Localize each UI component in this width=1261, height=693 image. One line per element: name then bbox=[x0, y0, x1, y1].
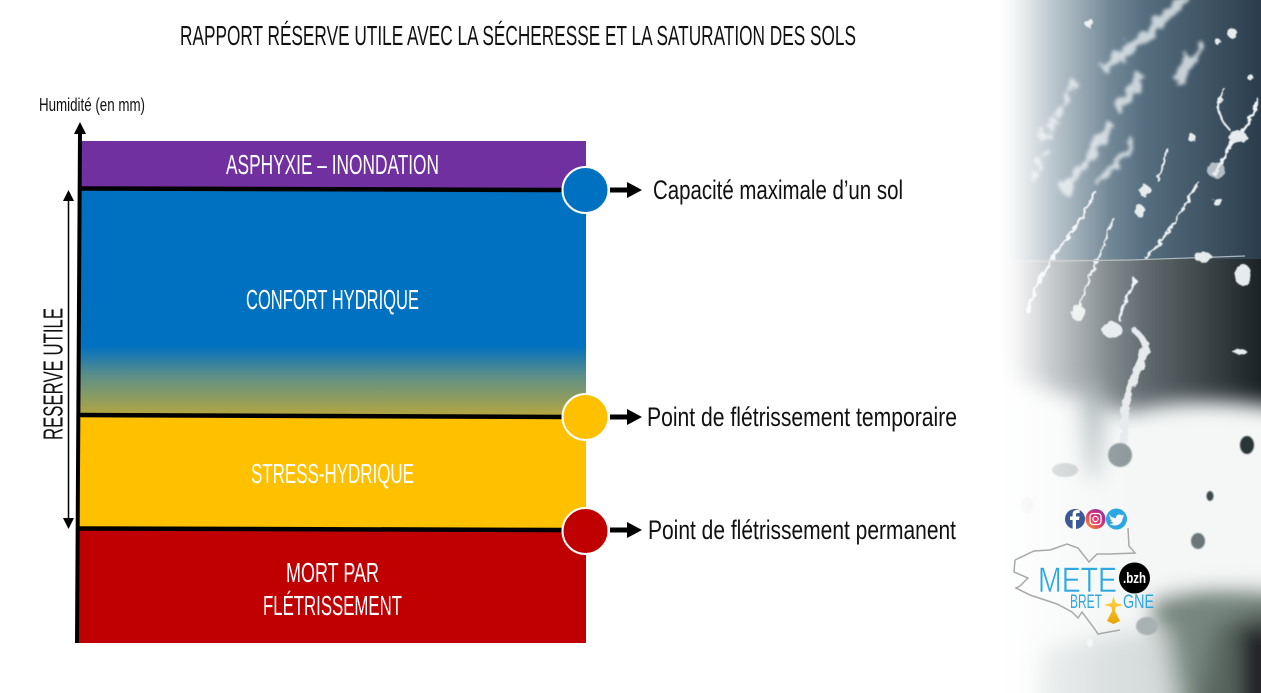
icon: twitter bbox=[1106, 508, 1127, 530]
map outline of Brittany bbox=[1014, 528, 1135, 634]
réserve utile label: RESERVE UTILE bbox=[38, 308, 68, 440]
zone: asphyxie bbox=[81, 141, 586, 191]
icon: instagram bbox=[1086, 509, 1106, 529]
BRETAGNE wordmark bbox=[1070, 592, 1154, 613]
label: flétrissement temporaire: Point de flétrissement temporaire bbox=[647, 402, 957, 432]
y axis label: Humidité (en mm) bbox=[39, 95, 145, 115]
METE wordmark: METE bbox=[1038, 561, 1117, 600]
zone: confort hydrique bbox=[79, 188, 586, 417]
réserve utile double arrow bbox=[63, 190, 74, 529]
.bzh badge: .bzh bbox=[1123, 570, 1146, 587]
background photo: water splashes bbox=[1011, 0, 1261, 693]
zone label: confort hydrique: CONFORT HYDRIQUE bbox=[246, 284, 419, 315]
waterline bbox=[1005, 256, 1245, 262]
zone: mort par flétrissement bbox=[77, 528, 586, 643]
zone label: stress hydrique: STRESS-HYDRIQUE bbox=[251, 458, 414, 489]
social icons bbox=[1065, 508, 1127, 530]
icon: facebook bbox=[1065, 509, 1085, 529]
BRETAGNE wordmark: GNE bbox=[1123, 592, 1154, 613]
BRETAGNE wordmark: BRET bbox=[1070, 592, 1102, 613]
zone: stress hydrique bbox=[78, 415, 586, 530]
label: flétrissement permanent: Point de flétrissement permanent bbox=[648, 515, 956, 545]
marker: capacité maximale bbox=[562, 167, 642, 213]
y axis arrow bbox=[74, 122, 86, 643]
zone label: asphyxie: ASPHYXIE – INONDATION bbox=[226, 149, 439, 180]
label: capacité maximale: Capacité maximale d’un sol bbox=[653, 175, 903, 205]
separator: capacité maximale bbox=[80, 188, 564, 190]
separator: flétrissement temporaire bbox=[78, 415, 564, 417]
zone label: mort par flétrissement bbox=[263, 557, 402, 621]
zone label: mort par flétrissement: MORT PAR bbox=[286, 557, 379, 588]
separator: flétrissement permanent bbox=[77, 528, 564, 530]
zone label: mort par flétrissement: FLÉTRISSEMENT bbox=[263, 590, 402, 621]
chart: soil water zones bbox=[74, 122, 586, 643]
marker: flétrissement permanent bbox=[562, 508, 642, 554]
icon: hermine bbox=[1104, 596, 1123, 624]
title: RAPPORT RÉSERVE UTILE AVEC LA SÉCHERESSE ET LA SATURATION DES SOLS bbox=[180, 20, 856, 51]
marker: flétrissement temporaire bbox=[562, 394, 642, 440]
droplets bbox=[1071, 18, 1253, 355]
logo: météo bretagne bbox=[1014, 528, 1154, 634]
splash highlights bbox=[1030, 0, 1200, 190]
